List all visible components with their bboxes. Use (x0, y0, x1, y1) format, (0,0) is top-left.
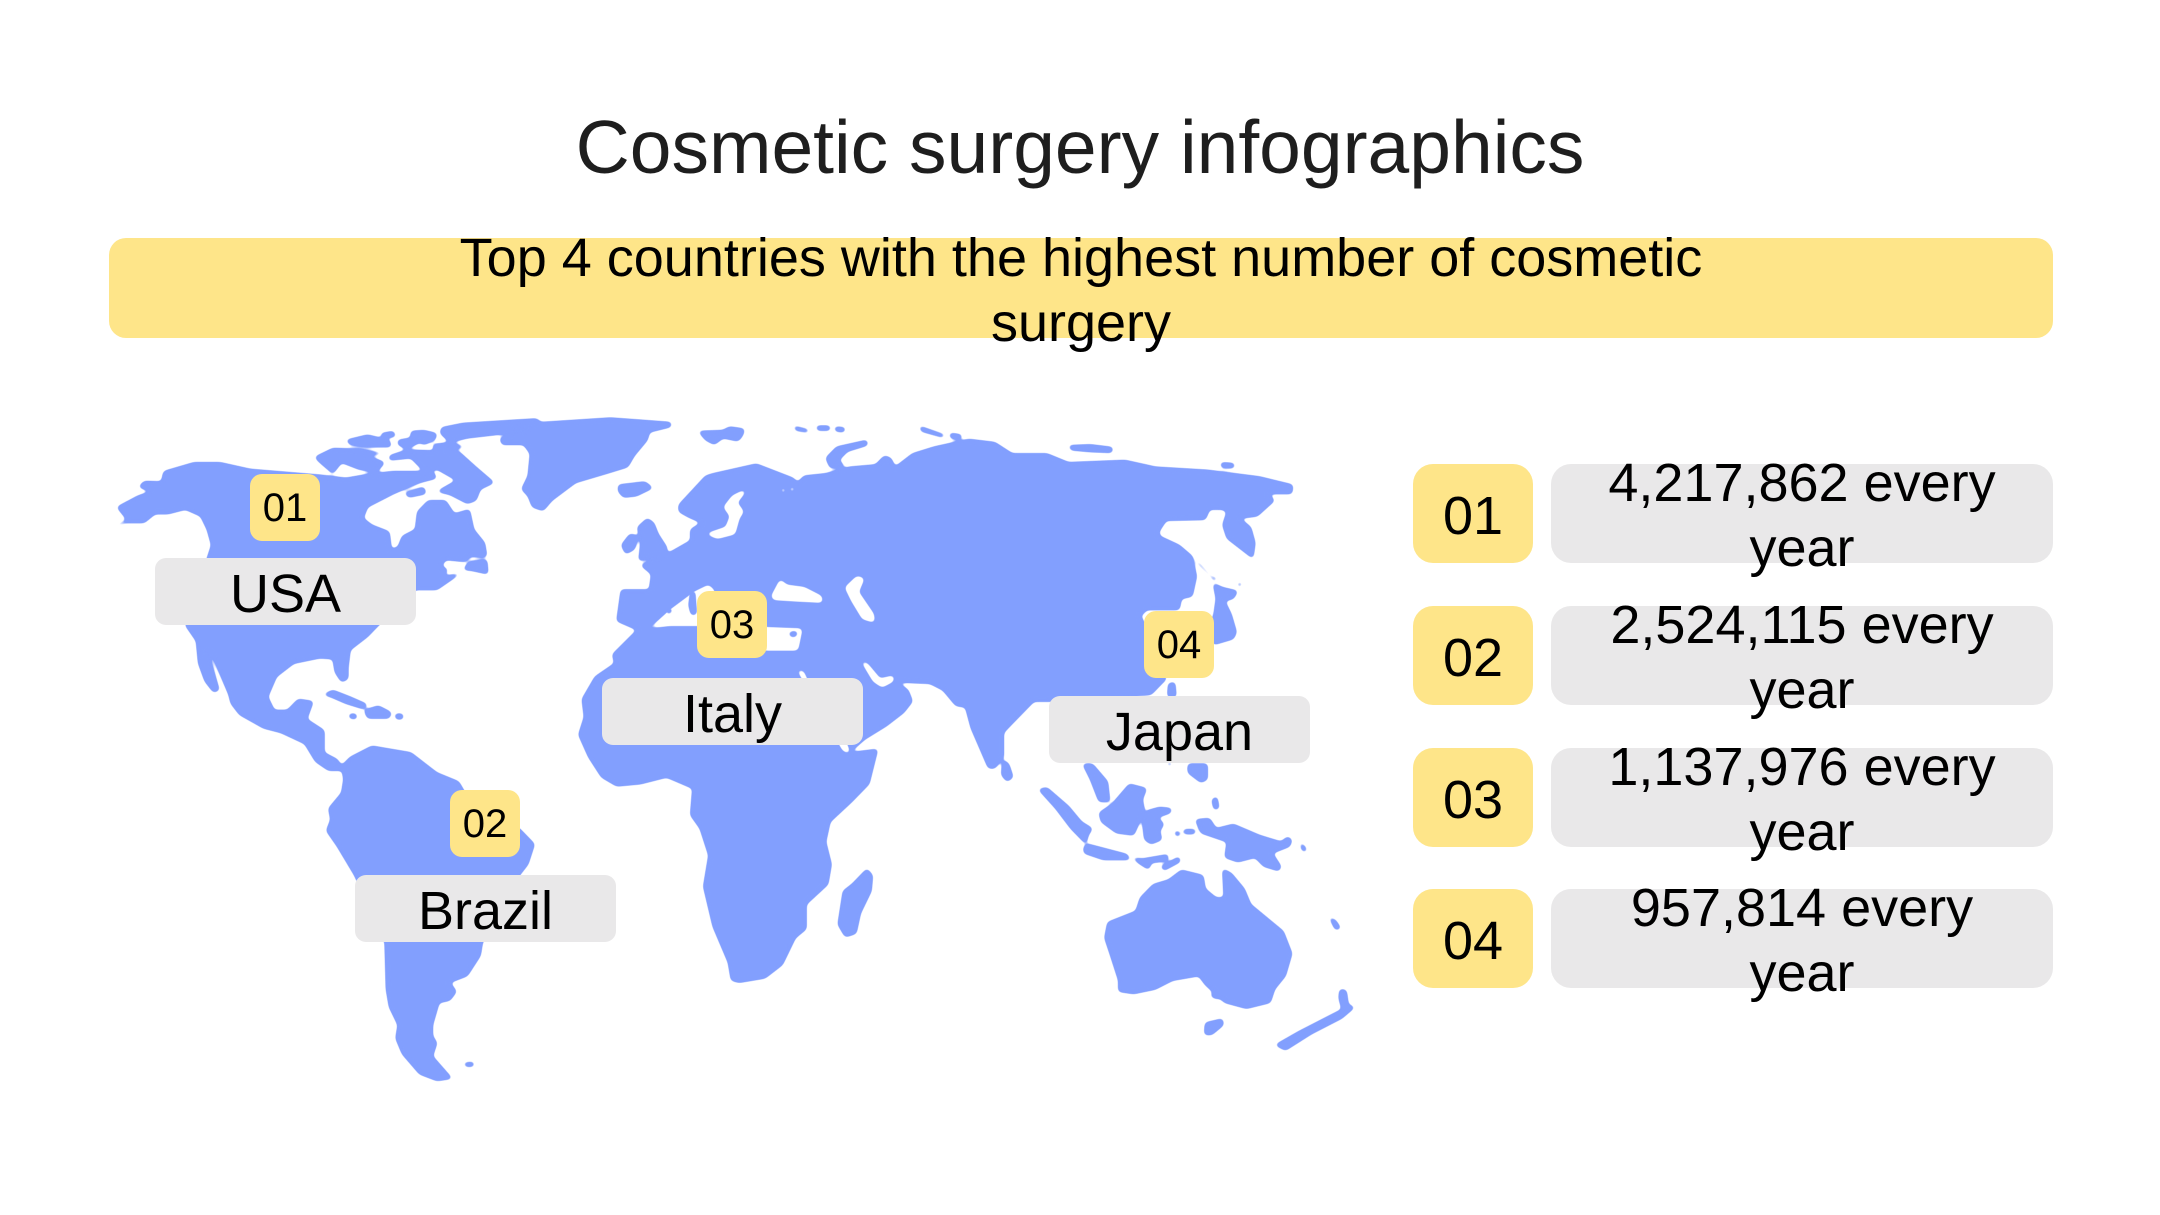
title: Cosmetic surgery infographics (576, 105, 1584, 189)
subtitle banner (109, 238, 2053, 338)
value: Brazil: 2,524,115 every (1610, 595, 1994, 655)
Caribbean islands (323, 690, 474, 1066)
rank badge 03: 03 (1443, 770, 1503, 830)
rank badge 02 (1413, 606, 1533, 705)
rank badge 01: 01 (1443, 486, 1503, 546)
value: Brazil: year (1749, 660, 1855, 720)
value: USA: year (1749, 518, 1855, 578)
Iceland, Britain and Ireland (618, 482, 667, 561)
value: USA (1551, 464, 2053, 563)
old world (579, 426, 1355, 1050)
Madagascar and Sri Lanka (838, 759, 1013, 937)
small islands in the seas (666, 591, 798, 637)
rank badge 03 (1413, 748, 1533, 847)
value: Japan: 957,814 every (1631, 878, 1973, 938)
Baltic Sea (707, 487, 795, 538)
map badge 02 (450, 790, 520, 857)
map label: Japan: Japan (1106, 702, 1253, 762)
value: Japan: year (1749, 943, 1855, 1003)
Eurasia and Africa (579, 439, 1293, 983)
Mediterranean Sea (637, 585, 802, 650)
Persian Gulf (861, 661, 894, 687)
Southeast Asia and Pacific islands (1038, 764, 1355, 1050)
americas (110, 418, 671, 1081)
value: Brazil (1551, 606, 2053, 705)
map label: Brazil: Brazil (418, 880, 553, 940)
map label: Italy (602, 678, 863, 745)
value: Italy (1551, 748, 2053, 847)
rank badge 01 (1413, 464, 1533, 563)
rank badge 04: 04 (1443, 910, 1503, 970)
Greenland and Arctic Canada (315, 418, 671, 574)
value: USA: 4,217,862 every (1608, 453, 1996, 513)
inland seas (637, 487, 894, 754)
value: Japan (1551, 889, 2053, 988)
subtitle banner: surgery (991, 292, 1171, 352)
map label: Italy: Italy (683, 684, 782, 744)
rank badge 02: 02 (1443, 628, 1503, 688)
Black Sea (772, 580, 822, 602)
map label: USA (155, 558, 416, 625)
map badge 01: 01 (263, 486, 307, 530)
value: Italy: year (1749, 802, 1855, 862)
Australia (1105, 869, 1292, 1008)
South America (326, 746, 535, 1081)
map label: Brazil (355, 875, 616, 942)
value: Italy: 1,137,976 every (1608, 737, 1996, 797)
map badge 03 (697, 591, 767, 658)
map badge 02: 02 (463, 802, 507, 846)
map label: Japan (1049, 696, 1310, 763)
map label: USA: USA (230, 564, 341, 624)
subtitle banner: Top 4 countries with the highest number of cosmetic (460, 228, 1702, 288)
rank badge 04 (1413, 889, 1533, 988)
map badge 04: 04 (1157, 622, 1201, 666)
map badge 03: 03 (710, 602, 754, 646)
Caspian Sea (845, 576, 874, 622)
map badge 04 (1144, 611, 1214, 678)
Red Sea (798, 670, 850, 754)
map badge 01 (250, 474, 320, 541)
North America (110, 462, 487, 771)
Arctic islands (698, 426, 1234, 468)
Japan and East Asian islands (1110, 557, 1242, 783)
